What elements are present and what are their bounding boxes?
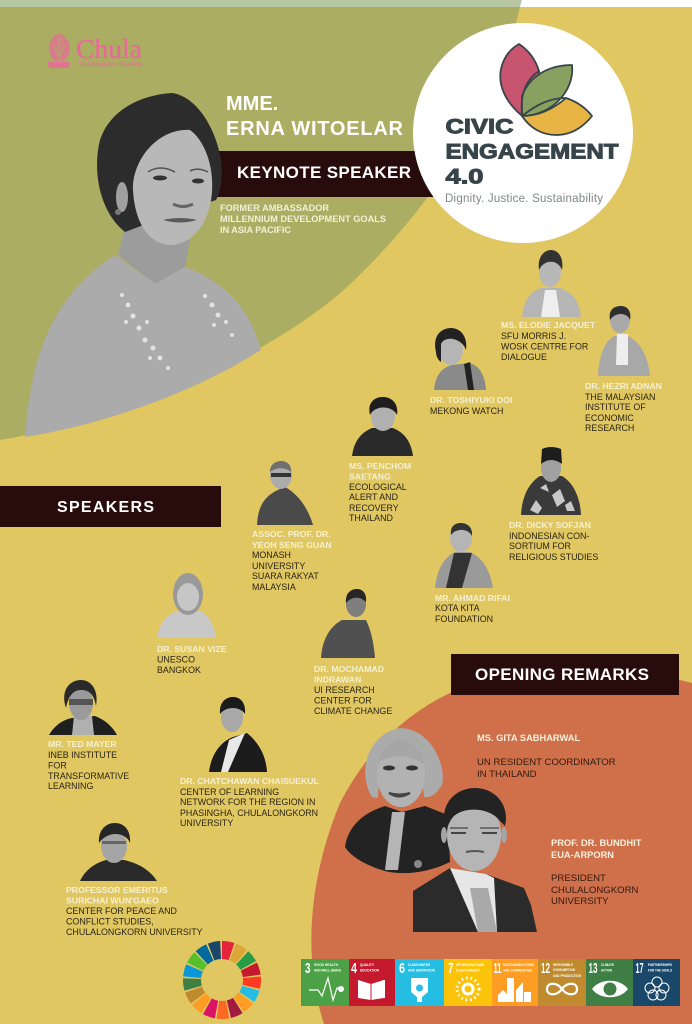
SDG tile 12: AND PRODUCTION: [553, 974, 581, 978]
speaker: Susan Vize: UNESCO: [157, 654, 195, 664]
speaker: Susan Vize: BANGKOK: [157, 665, 201, 675]
SDG tile 3: GOOD HEALTH: [314, 963, 338, 967]
top strip: [0, 0, 692, 7]
speaker: Chatchawan Chaisuekul: CENTER OF LEARNING: [180, 787, 279, 797]
speaker: Chatchawan Chaisuekul: DR. CHATCHAWAN CHAISUEKUL: [180, 776, 320, 786]
speaker: Ted Mayer: LEARNING: [48, 781, 93, 791]
keynote role: [220, 203, 386, 235]
speaker: Bundhit Eua-Arporn: PROF. DR. BUNDHIT: [551, 838, 642, 848]
speaker: Chatchawan Chaisuekul: UNIVERSITY: [180, 818, 233, 828]
speaker: Ted Mayer: TRANSFORMATIVE: [48, 771, 129, 781]
keynote heading: KEYNOTE SPEAKER: [237, 163, 411, 182]
speaker: Hezri Adnan: [585, 306, 662, 433]
speaker: Bundhit Eua-Arporn: PRESIDENT: [551, 873, 606, 884]
speaker: Surichai Wun'Gaeo: CONFLICT STUDIES,: [66, 916, 154, 926]
speaker: Mochamad Indrawan: DR. MOCHAMAD: [314, 664, 384, 674]
speaker: Penchom Saetang: RECOVERY: [349, 503, 399, 513]
logo: Civic Engagement 4.0: 4.0: [446, 164, 484, 188]
logo: Civic Engagement 4.0: Dignity. Justice. Sustainability: [445, 193, 603, 205]
speaker: Dicky Sofjan: SORTIUM FOR: [509, 541, 571, 551]
speaker: Dicky Sofjan: DR. DICKY SOFJAN: [509, 520, 591, 530]
speaker: Ahmad Rifai: FOUNDATION: [435, 614, 493, 624]
speaker: Toshiyuki Doi: DR. TOSHIYUKI DOI: [430, 395, 512, 405]
speaker: Hezri Adnan: THE MALAYSIAN: [585, 392, 655, 402]
speaker: Yeoh Seng Guan: YEOH SENG GUAN: [252, 540, 332, 550]
speaker: Elodie Jacquet: MS. ELODIE JACQUET: [501, 320, 596, 330]
SDG tile 6: AND SANITATION: [408, 968, 435, 972]
speaker: Bundhit Eua-Arporn: UNIVERSITY: [551, 896, 609, 907]
SDG tile 12: [538, 959, 586, 1006]
speaker: Ted Mayer: [48, 680, 129, 791]
panel: opening remarks orange area: [311, 671, 692, 1024]
SDG tile 7: CLEAN ENERGY: [456, 968, 480, 972]
opening remarks heading: [451, 654, 679, 695]
SDG tile 3: 3: [305, 960, 310, 977]
keynote role: MILLENNIUM DEVELOPMENT GOALS: [220, 214, 386, 224]
opening remarks heading: OPENING REMARKS: [475, 665, 649, 684]
speaker: Elodie Jacquet: DIALOGUE: [501, 352, 547, 362]
SDG tile 11: [492, 959, 538, 1006]
speaker: Mochamad Indrawan: CLIMATE CHANGE: [314, 706, 392, 716]
speaker: Dicky Sofjan: [509, 447, 598, 562]
SDG tile 13: 13: [588, 960, 598, 977]
logo: Civic Engagement 4.0: CIVIC: [446, 114, 514, 138]
logo: Chula: [48, 34, 142, 68]
speaker: Ahmad Rifai: KOTA KITA: [435, 603, 480, 613]
keynote banner: [205, 151, 440, 197]
speakers heading: [0, 486, 221, 527]
speaker: Yeoh Seng Guan: UNIVERSITY: [252, 561, 305, 571]
speaker: Penchom Saetang: [349, 397, 413, 523]
SDG tile 3: [301, 959, 349, 1006]
speaker: Yeoh Seng Guan: MONASH: [252, 550, 291, 560]
speaker: Surichai Wun'Gaeo: SURICHAI WUN'GAEO: [66, 896, 159, 906]
speaker: Toshiyuki Doi: [430, 328, 512, 416]
SDG tile 12: 12: [541, 960, 550, 977]
SDG tile 17: FOR THE GOALS: [648, 968, 672, 972]
speaker: Ted Mayer: MR. TED MAYER: [48, 739, 117, 749]
speaker: Hezri Adnan: ECONOMIC: [585, 413, 634, 423]
speaker: Ahmad Rifai: [435, 523, 510, 624]
logo: Civic Engagement 4.0: ENGAGEMENT: [446, 140, 618, 164]
SDG tile 11: 11: [494, 960, 502, 977]
speaker: Mochamad Indrawan: INDRAWAN: [314, 674, 361, 684]
speaker: Surichai Wun'Gaeo: CENTER FOR PEACE AND: [66, 906, 177, 916]
SDG tile 11: SUSTAINABLE CITIES: [503, 963, 534, 967]
SDG tile 6: [395, 959, 444, 1006]
SDG tile 13: CLIMATE: [601, 963, 614, 967]
speaker: Mochamad Indrawan: [314, 589, 392, 716]
SDG tile 11: AND COMMUNITIES: [503, 968, 533, 972]
speaker: Surichai Wun'Gaeo: PROFESSOR EMERITUS: [66, 885, 168, 895]
speaker: Yeoh Seng Guan: MALAYSIA: [252, 582, 296, 592]
speaker: Susan Vize: DR. SUSAN VIZE: [157, 644, 227, 654]
keynote role: FORMER AMBASSADOR: [220, 203, 329, 213]
SDG tile 17: PARTNERSHIPS: [648, 963, 673, 967]
speaker: Penchom Saetang: THAILAND: [349, 513, 393, 523]
SDG tile 12: RESPONSIBLE: [553, 963, 573, 967]
keynote portrait: [25, 93, 261, 437]
keynote name: MME.: [226, 93, 278, 115]
speaker: Yeoh Seng Guan: ASSOC. PROF. DR.: [252, 529, 331, 539]
speaker: Bundhit Eua-Arporn: CHULALONGKORN: [551, 885, 638, 896]
speaker: Hezri Adnan: INSTITUTE OF: [585, 402, 646, 412]
speaker: Elodie Jacquet: WOSK CENTRE FOR: [501, 342, 588, 352]
speaker: Mochamad Indrawan: UI RESEARCH: [314, 685, 375, 695]
SDG tile 13: [586, 959, 633, 1006]
speaker: Penchom Saetang: SAETANG: [349, 472, 391, 482]
speaker: Hezri Adnan: RESEARCH: [585, 423, 634, 433]
speaker: Surichai Wun'Gaeo: [66, 823, 203, 937]
icon: SDG wheel: [180, 938, 264, 1022]
SDG tile 4: QUALITY: [360, 963, 375, 967]
SDG tile 6: CLEAN WATER: [408, 963, 430, 967]
speaker: Hezri Adnan: DR. HEZRI ADNAN: [585, 381, 662, 391]
speaker: Gita Sabharwal: UN RESIDENT COORDINATOR: [477, 757, 616, 768]
SDG tile 17: [633, 959, 680, 1006]
logo: Chula: Chula: [76, 34, 142, 64]
SDG tile 17: 17: [636, 960, 644, 977]
speaker: Gita Sabharwal: IN THAILAND: [477, 769, 537, 780]
SDG tile 7: AFFORDABLE AND: [456, 963, 484, 967]
speaker: Penchom Saetang: ECOLOGICAL: [349, 482, 407, 492]
speaker: Penchom Saetang: MS. PENCHOM: [349, 461, 411, 471]
speaker: Toshiyuki Doi: MEKONG WATCH: [430, 406, 503, 416]
speaker: Chatchawan Chaisuekul: [180, 697, 320, 828]
speaker: Gita Sabharwal: [345, 728, 616, 873]
speaker: Ahmad Rifai: MR. AHMAD RIFAI: [435, 593, 510, 603]
speaker: Bundhit Eua-Arporn: [413, 788, 642, 932]
speaker: Susan Vize: [157, 573, 227, 675]
speaker: Mochamad Indrawan: CENTER FOR: [314, 696, 372, 706]
speaker: Dicky Sofjan: RELIGIOUS STUDIES: [509, 552, 598, 562]
keynote name: ERNA WITOELAR: [226, 118, 404, 140]
speaker: Elodie Jacquet: SFU MORRIS J.: [501, 331, 566, 341]
speaker: Ted Mayer: FOR: [48, 760, 67, 770]
SDG tile 7: [444, 959, 492, 1006]
speaker: Penchom Saetang: ALERT AND: [349, 492, 398, 502]
speaker: Yeoh Seng Guan: SUARA RAKYAT: [252, 571, 319, 581]
SDG tile 7: 7: [448, 960, 454, 977]
panel: keynote olive area: [0, 7, 520, 440]
speaker: Elodie Jacquet: [501, 250, 596, 362]
speaker: Dicky Sofjan: INDONESIAN CON-: [509, 531, 589, 541]
SDG tile 4: EDUCATION: [360, 968, 379, 972]
keynote role: IN ASIA PACIFIC: [220, 225, 291, 235]
keynote name: [226, 93, 404, 140]
speaker: Gita Sabharwal: MS. GITA SABHARWAL: [477, 733, 580, 743]
SDG tile 3: AND WELL-BEING: [314, 968, 341, 972]
speaker: Chatchawan Chaisuekul: PHASINGHA, CHULALONGKORN: [180, 808, 318, 818]
speaker: Bundhit Eua-Arporn: EUA-ARPORN: [551, 850, 614, 860]
SDG tile 4: [349, 959, 395, 1006]
logo: Chula: Chulalongkorn University: [77, 62, 142, 68]
speaker: Chatchawan Chaisuekul: NETWORK FOR THE REGION IN: [180, 797, 315, 807]
SDG tile 12: CONSUMPTION: [553, 968, 575, 972]
SDG tile 4: 4: [351, 960, 357, 977]
speaker: Yeoh Seng Guan: [252, 461, 332, 592]
speaker: Ted Mayer: INEB INSTITUTE: [48, 750, 117, 760]
SDG tile 6: 6: [399, 960, 405, 977]
speaker: Surichai Wun'Gaeo: CHULALONGKORN UNIVERSITY: [66, 927, 203, 937]
logo: Civic Engagement 4.0: [413, 23, 633, 243]
speakers heading: SPEAKERS: [57, 499, 154, 516]
SDG tile 13: ACTION: [601, 968, 612, 972]
